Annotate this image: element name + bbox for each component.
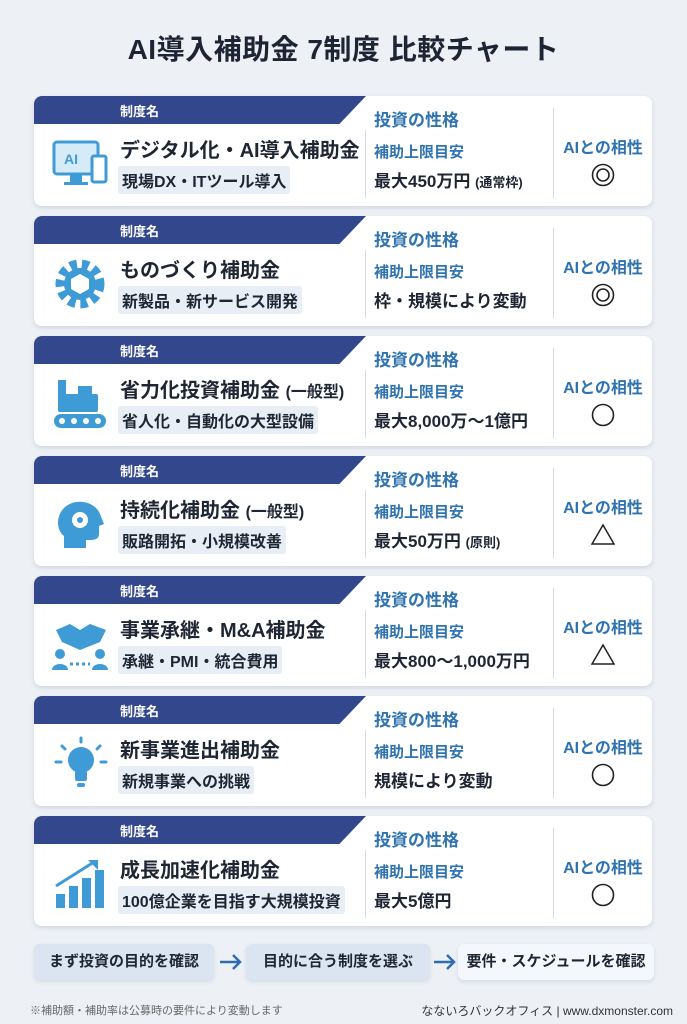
card 5: jigyo shokei: AIとの相性 [563, 620, 643, 637]
card 5: jigyo shokei: 補助上限目安 [374, 624, 464, 641]
icon: growth bar chart [55, 860, 104, 908]
card 2: monozukuri: AIとの相性 [563, 260, 643, 277]
card 1: digital AI: 投資の性格 [374, 111, 459, 130]
symbol: circle [592, 764, 614, 786]
card 1: digital AI: 補助上限目安 [374, 144, 464, 161]
footnote: ※補助額・補助率は公募時の要件により変動します [30, 1005, 283, 1017]
card 1: digital AI: 最大450万円 (通常枠) [374, 172, 523, 191]
symbol: circle [592, 884, 614, 906]
flow steps [33, 944, 655, 983]
card 3: shoryokuka: 投資の性格 [374, 351, 459, 370]
icon: gear [56, 260, 104, 308]
card 3: shoryokuka [34, 336, 652, 446]
arrow 1 [220, 954, 242, 970]
icon: head with gear [58, 502, 104, 548]
card 7: seicho kasokuka: 投資の性格 [374, 831, 459, 850]
symbol: triangle [591, 644, 615, 665]
card 1: digital AI [34, 96, 652, 206]
card 4: jizokuka: 制度名 [120, 464, 159, 479]
card 3: shoryokuka: 省力化投資補助金 (一般型) [120, 380, 344, 402]
step 2 [246, 944, 430, 980]
card 3: shoryokuka: AIとの相性 [563, 380, 643, 397]
card 5: jigyo shokei: 制度名 [120, 584, 159, 599]
step 2: 目的に合う制度を選ぶ [263, 953, 413, 970]
symbol: triangle [591, 524, 615, 545]
card 5: jigyo shokei [34, 576, 652, 686]
card 6: shinjigyo: 規模により変動 [374, 772, 493, 791]
card 6: shinjigyo: 投資の性格 [374, 711, 459, 730]
card 2: monozukuri: 制度名 [120, 224, 159, 239]
card 6: shinjigyo: 新事業進出補助金 [120, 740, 280, 762]
card 7: seicho kasokuka: 最大5億円 [374, 892, 451, 911]
arrow 2 [434, 954, 456, 970]
card 7: seicho kasokuka [34, 816, 652, 926]
card 2: monozukuri: 枠・規模により変動 [374, 292, 527, 311]
card 5: jigyo shokei: 事業承継・M&A補助金 [120, 620, 326, 642]
step 3 [458, 944, 654, 980]
card 1: digital AI: 現場DX・ITツール導入 [122, 174, 286, 191]
card 7: seicho kasokuka: 100億企業を目指す大規模投資 [122, 894, 341, 911]
card 5: jigyo shokei: 承継・PMI・統合費用 [122, 654, 278, 671]
card 6: shinjigyo: 制度名 [120, 704, 159, 719]
card 6: shinjigyo: 新規事業への挑戦 [122, 774, 250, 791]
symbol: circle [592, 404, 614, 426]
card 6: shinjigyo: AIとの相性 [563, 740, 643, 757]
icon: handshake people [52, 624, 108, 670]
card 7: seicho kasokuka: 制度名 [120, 824, 159, 839]
icon: monitor AI: AI [64, 151, 78, 167]
step 1: まず投資の目的を確認 [49, 953, 199, 970]
card 6: shinjigyo: 補助上限目安 [374, 744, 464, 761]
card 4: jizokuka: AIとの相性 [563, 500, 643, 517]
card 7: seicho kasokuka: 補助上限目安 [374, 864, 464, 881]
card 5: jigyo shokei: 投資の性格 [374, 591, 459, 610]
step 1 [34, 944, 214, 980]
card 4: jizokuka: 持続化補助金 (一般型) [120, 500, 304, 522]
card 7: seicho kasokuka: 成長加速化補助金 [120, 860, 280, 882]
card 1: digital AI: AIとの相性 [563, 140, 643, 157]
card 3: shoryokuka: 最大8,000万～1億円 [374, 412, 528, 431]
card 3: shoryokuka: 省人化・自動化の大型設備 [122, 414, 314, 431]
card 2: monozukuri: ものづくり補助金 [120, 260, 280, 282]
card 1: digital AI: デジタル化・AI導入補助金 [120, 140, 360, 162]
card 2: monozukuri: 補助上限目安 [374, 264, 464, 281]
card 5: jigyo shokei: 最大800～1,000万円 [374, 652, 530, 671]
card 2: monozukuri: 新製品・新サービス開発 [122, 294, 298, 311]
card 6: shinjigyo [34, 696, 652, 806]
card 3: shoryokuka: 制度名 [120, 344, 159, 359]
credit: なないろバックオフィス | www.dxmonster.com [421, 1004, 673, 1018]
title: AI導入補助金 7制度 比較チャート [128, 34, 559, 65]
card 4: jizokuka: 補助上限目安 [374, 504, 464, 521]
card 4: jizokuka: 最大50万円 (原則) [374, 532, 500, 551]
symbol: double circle [592, 164, 614, 186]
card 4: jizokuka: 投資の性格 [374, 471, 459, 490]
icon: lightbulb [54, 736, 108, 787]
card 2: monozukuri: 投資の性格 [374, 231, 459, 250]
icon: monitor AI [52, 140, 108, 185]
card 1: digital AI: 制度名 [120, 104, 159, 119]
card 4: jizokuka [34, 456, 652, 566]
card 4: jizokuka: 販路開拓・小規模改善 [122, 534, 282, 551]
icon: factory conveyor [54, 380, 106, 428]
card 7: seicho kasokuka: AIとの相性 [563, 860, 643, 877]
card 3: shoryokuka: 補助上限目安 [374, 384, 464, 401]
symbol: double circle [592, 284, 614, 306]
card 2: monozukuri [34, 216, 652, 326]
step 3: 要件・スケジュールを確認 [467, 953, 645, 970]
